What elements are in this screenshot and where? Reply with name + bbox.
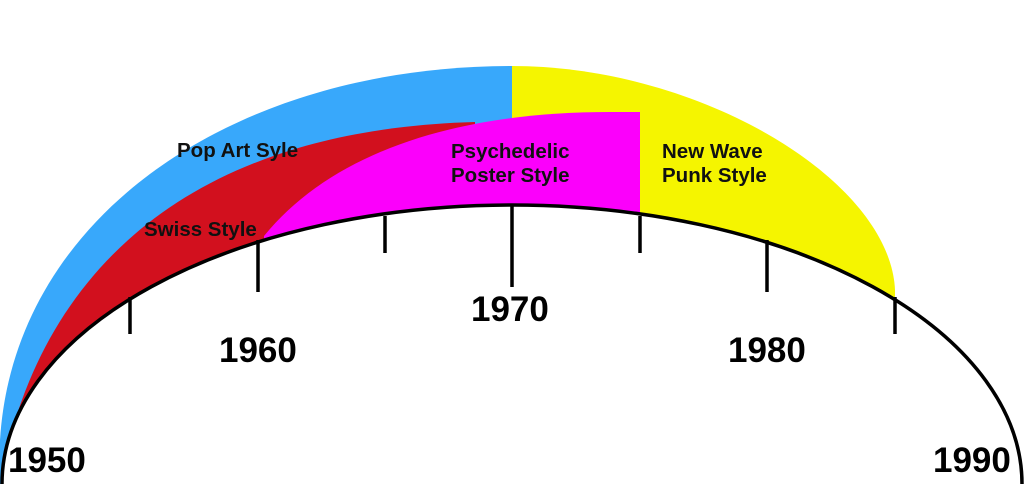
style labels: New Wave [662,140,763,163]
style labels: Poster Style [451,164,570,187]
year labels [8,290,1011,480]
style labels [144,139,767,241]
band: psychedelic poster (magenta) [264,112,640,484]
style labels: Swiss Style [144,218,257,241]
year labels: 1990 [933,441,1011,480]
white interior under arc [2,205,1022,484]
style labels: Pop Art Syle [177,139,298,162]
band: swiss style (red) [2,122,475,484]
year labels: 1970 [471,290,549,329]
band: new wave punk (yellow) [512,66,895,484]
tick marks [130,205,895,334]
year labels: 1950 [8,441,86,480]
year labels: 1960 [219,331,297,370]
band: pop art (blue) [0,66,512,484]
year labels: 1980 [728,331,806,370]
timeline arc [2,205,1022,484]
style labels: Psychedelic [451,140,570,163]
style labels: Punk Style [662,164,767,187]
